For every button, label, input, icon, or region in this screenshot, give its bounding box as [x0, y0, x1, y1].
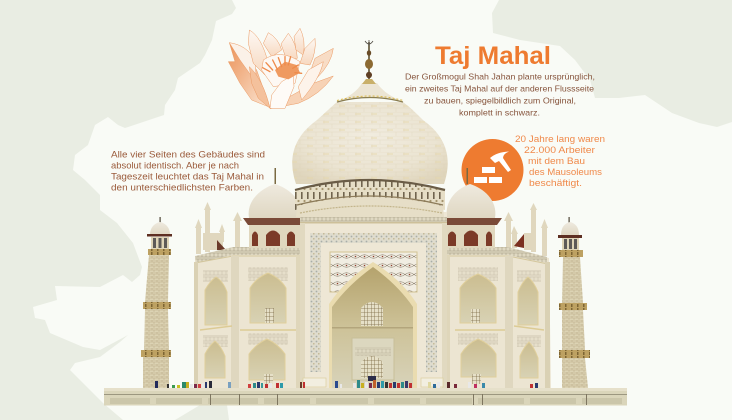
- text block: history: zu bauen, spiegelbildlich zum Original,: [424, 96, 576, 106]
- text block: four sides: Alle vier Seiten des Gebäudes sind: [111, 150, 265, 160]
- title: Taj Mahal: [435, 42, 551, 70]
- text block: workers: beschäftigt.: [529, 178, 582, 188]
- text block: four sides: absolut identisch. Aber je nach: [111, 160, 239, 170]
- map: bottom patch: [175, 405, 229, 420]
- dome finial: [362, 40, 376, 84]
- main dome: [292, 83, 448, 184]
- left chhatri: [243, 168, 305, 248]
- text block: history: ein zweites Taj Mahal auf der anderen Flussseite: [405, 84, 594, 94]
- map: left landmass: [0, 0, 236, 420]
- text block: workers: 20 Jahre lang waren: [515, 134, 605, 144]
- crowd of visitors: [155, 380, 538, 388]
- text block: four sides: Tageszeit leuchtet das Taj Mahal in: [111, 172, 264, 182]
- text block: history: komplett in schwarz.: [459, 108, 540, 118]
- icon: hammer and bricks badge: [462, 139, 524, 201]
- left wing: [194, 247, 303, 388]
- icon: lotus flower: [228, 28, 333, 109]
- text block: workers: des Mausoleums: [529, 167, 603, 177]
- text block: four sides: [111, 150, 265, 192]
- text block: four sides: den unterschiedlichsten Farben.: [111, 182, 253, 192]
- central block: [295, 180, 447, 388]
- text block: workers: 22.000 Arbeiter: [524, 145, 595, 155]
- text block: history: Der Großmogul Shah Jahan plante ursprünglich,: [405, 72, 595, 82]
- right wing: [443, 247, 551, 388]
- right roof turrets: [504, 203, 548, 256]
- building: Taj Mahal: [104, 40, 627, 406]
- text block: workers: mit dem Bau: [528, 156, 585, 166]
- map: right landmass: [492, 0, 732, 127]
- text block: history: [405, 72, 595, 118]
- right minaret: [558, 217, 590, 388]
- left minaret: [141, 217, 172, 388]
- platform: [104, 388, 627, 406]
- right chhatri: [443, 168, 502, 248]
- left roof turrets: [195, 202, 242, 254]
- text block: workers: [515, 134, 605, 188]
